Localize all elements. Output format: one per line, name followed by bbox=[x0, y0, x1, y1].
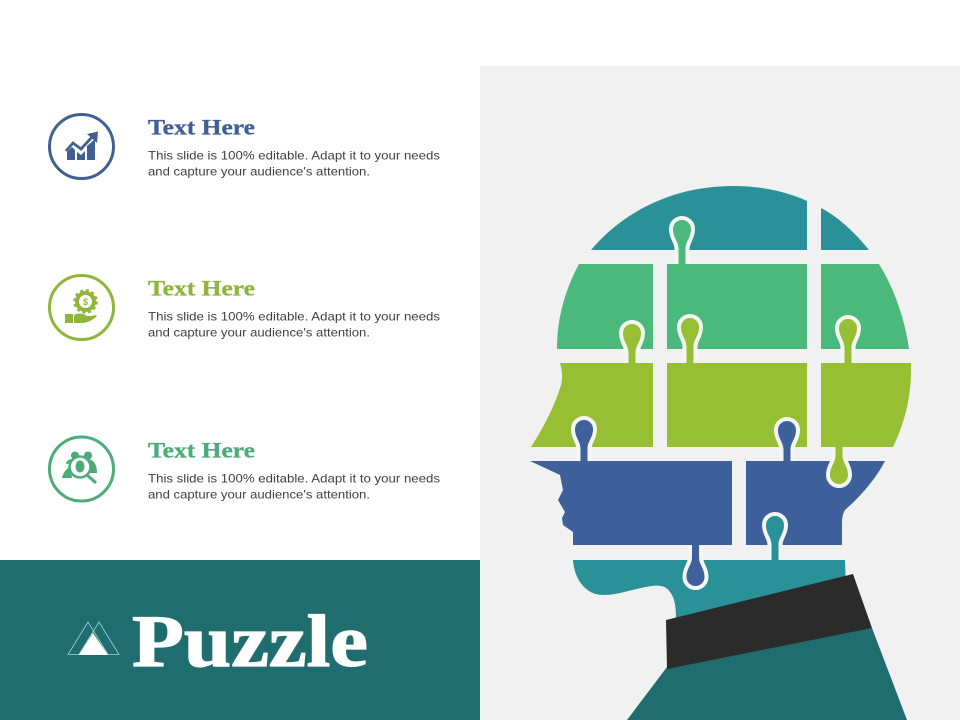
puzzle tab: teal neck bbox=[766, 516, 784, 560]
teal crown pieces bbox=[591, 186, 869, 250]
description: This slide is 100% editable. Adapt it to your needs bbox=[148, 148, 440, 162]
olive row pieces bbox=[531, 363, 911, 447]
blue face pieces bbox=[530, 461, 885, 545]
puzzle tab: blue left bbox=[575, 420, 593, 461]
heading: Text Here bbox=[148, 114, 255, 140]
description bbox=[148, 472, 440, 502]
dark body bbox=[627, 628, 907, 720]
green row pieces bbox=[557, 264, 909, 349]
puzzle tab: blue right bbox=[778, 421, 796, 461]
icon: triangles bbox=[68, 622, 119, 655]
description: This slide is 100% editable. Adapt it to your needs bbox=[148, 310, 440, 324]
description: and capture your audience's attention. bbox=[148, 164, 370, 178]
item 1: growth bbox=[50, 114, 440, 178]
puzzle tab: olive middle bbox=[681, 318, 699, 363]
description bbox=[148, 148, 440, 178]
icon: growth chart bbox=[50, 114, 114, 178]
teal neck bbox=[573, 560, 846, 625]
icon: people under magnifier bbox=[50, 437, 114, 501]
item 2: finance bbox=[50, 276, 440, 340]
puzzle tab: olive down bbox=[830, 447, 848, 484]
heading: Text Here bbox=[148, 276, 255, 300]
panel: title banner bbox=[0, 560, 480, 720]
title: Puzzle bbox=[132, 601, 368, 683]
puzzle tab: olive left bbox=[623, 324, 641, 363]
head silhouette puzzle bbox=[530, 186, 911, 720]
icon: hand holding gear bbox=[50, 276, 114, 340]
black collar bbox=[666, 574, 872, 669]
puzzle tab: green top bbox=[673, 220, 691, 264]
description: and capture your audience's attention. bbox=[148, 326, 370, 340]
heading: Text Here bbox=[148, 438, 255, 462]
puzzle tab: olive right bbox=[839, 319, 857, 363]
panel: right grey background bbox=[480, 66, 960, 720]
icon: hand holding gear: $ bbox=[83, 297, 88, 307]
description: and capture your audience's attention. bbox=[148, 488, 370, 502]
description: This slide is 100% editable. Adapt it to your needs bbox=[148, 472, 440, 486]
item 3: people search bbox=[50, 437, 440, 502]
description bbox=[148, 310, 440, 340]
puzzle tab: blue down bbox=[686, 545, 704, 586]
